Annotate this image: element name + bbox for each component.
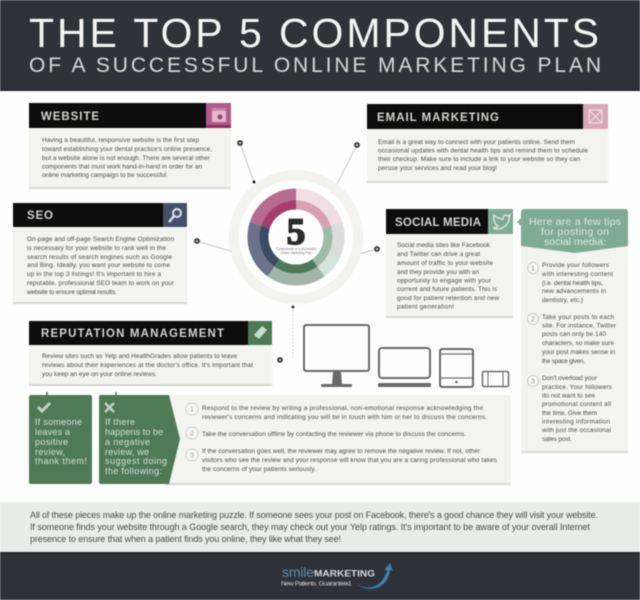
icon: phone [482,372,508,386]
icon: twitter bird [488,209,513,234]
tip 1: 1 [531,266,535,272]
donut caption: Online Marketing Plan [280,251,312,255]
summary band: If someone finds your website through a Google search, they may check out your Yelp ratings. It's important to be aware of your overall Internet [30,522,590,532]
header banner [0,0,640,91]
step 2: Take the conversation offline by contacting the reviewer via phone to discuss the concerns. [202,431,466,438]
step 1: reviewer's concerns and indicating you will be in touch with him or her to discuss the concerns. [202,414,487,421]
callout: negative review: suggest doing [105,456,167,466]
panel: seo [13,203,187,304]
callout: negative review [99,395,180,484]
tip 3: practice. Your followers [542,384,612,391]
heading: reputation management: REPUTATION MANAGEMENT [41,328,224,340]
tip 2: your post makes sense in [542,349,615,356]
text: social media: amount of traffic to your website [397,260,493,267]
heading: social media: SOCIAL MEDIA [395,217,481,229]
step 1: 1 [190,406,194,414]
donut caption [276,247,317,255]
tips header: Here are a few tips [529,216,621,228]
heading: seo: SEO [27,210,53,222]
callout: positive review: review, [35,447,65,457]
text: reputation management: reviews about their experiences at the doctor's office. It's important that [42,362,253,369]
panel: review steps [165,395,511,485]
step 2 [186,427,466,439]
connectors [47,141,379,395]
icon: laptop [378,348,431,387]
tip 3: promotional content all [542,401,611,408]
panel: social media [386,209,513,318]
footer [0,552,640,600]
icon: envelope [583,104,608,129]
text: email marketing: Email is a great way to connect with your patients online. Send them [378,139,575,146]
icon: tag [248,321,272,345]
callout: negative review: the following: [105,466,162,476]
tip 3: with just the occasional [541,427,611,434]
text: social media: Social media sites like Facebook [397,242,491,249]
text: seo: reputable, professional SEO team to work on your [27,280,175,287]
chart: five-segment donut [234,175,358,299]
text: website: online marketing campaign to be successful. [42,172,168,179]
panel: website [29,103,231,189]
logo: MARKETING [314,568,375,580]
callout: negative review: If there [105,417,135,427]
tip 2: site. For instance, Twitter [542,322,617,330]
tip 2: characters, so make sure [542,340,614,347]
tip 3: Don't overload your [542,375,598,382]
callout: negative review: review, we [105,447,149,457]
text: website: components that must work hand-in-hand in order for an [42,164,202,170]
logo: smile [282,564,314,580]
text: seo: up in the top 3 listings! It's important to hire a [27,271,161,278]
subtitle: OF A SUCCESSFUL ONLINE MARKETING PLAN [29,54,601,77]
icon: website [206,103,231,128]
text: seo: website to ensure optimal results. [26,289,117,296]
callout: positive review [29,395,92,484]
summary band [0,502,640,552]
callout: positive review: positive [35,437,68,447]
step 1 [186,403,487,421]
text: social media: good for patient retention and new [397,295,499,302]
tip 2: Take your posts to each [542,314,614,321]
step 3: If the conversation goes well, the reviewer may agree to remove the negative review. If not, other [202,448,481,455]
callout: positive review: leaves a [35,427,70,437]
heading: email marketing: EMAIL MARKETING [377,112,499,124]
tip 2: posts can only be 140 [542,331,606,338]
text: email marketing: peruse your services and read your blog! [378,165,497,172]
tip 2: the space given. [542,358,585,365]
tip 3: interesting information [542,418,610,426]
callout: positive review: thank them! [35,456,87,466]
step 1: Respond to the review by writing a professional, non-emotional response acknowledging the [202,405,483,412]
callout: negative review: happens to be [105,427,163,437]
step 3 [186,448,497,473]
tip 3: 3 [531,378,535,386]
text: seo: search results of search engines such as Google [27,254,172,261]
panel: social media tips [517,209,628,453]
text: seo: is necessary for your website to rank well in the [27,245,166,252]
tip 1: dentistry, etc.) [542,297,583,304]
tip 3 [528,375,612,443]
icon: logo arrow [356,563,393,589]
donut number: 5 [287,212,305,253]
text: social media: and Twitter can drive a great [397,251,480,258]
summary band: All of these pieces make up the online marketing puzzle. If someone sees your post on Facebook, there's a good chance they will visit your website. [30,510,598,520]
tip 1: Provide your followers [542,262,609,269]
tips header: social media: [544,236,606,248]
step 3: visitors who see the review and your response will know that you are a caring professional who takes [202,457,497,464]
text: website: Having a beautiful, responsive website is the first step [42,137,199,144]
text: website: but a website alone is not enough. There are several other [42,155,211,162]
summary band: presence to ensure that when a patient finds you online, they like what they see! [30,534,341,544]
text: reputation management: Review sites such as Yelp and HealthGrades allow patients to leave [42,353,237,360]
text: social media [397,242,499,310]
logo: New Patients. Guaranteed. [281,580,352,588]
logo [281,563,393,589]
text: website [42,137,212,179]
panel: email marketing [367,104,608,183]
title: THE TOP 5 COMPONENTS [29,10,599,56]
text: website: toward establishing your dental practice's online presence, [42,146,212,153]
tip 1: (i.e. dental health tips, [542,280,603,287]
tip 1 [528,262,613,304]
tip 1: with interesting content [541,271,613,278]
callout: positive review: If someone [35,417,82,427]
text: reputation management [42,353,253,378]
text: social media: current and future patients. This is [397,286,497,293]
text: social media: and they provide you with an [397,269,479,276]
step 3: 3 [190,452,194,460]
text: reputation management: you keep an eye on your online reviews. [42,371,157,378]
icon: desktop monitor [304,325,369,387]
tip 2: 2 [531,316,535,324]
icon: check mark [38,403,50,411]
tip 3: sales post. [542,436,572,443]
text: email marketing [378,139,588,172]
tips header: for posting on [541,226,609,238]
tip 3: do not want to see [542,392,595,400]
text: social media: patient generation! [397,304,454,310]
icon: cross mark [105,403,114,412]
text: seo: On-page and off-page Search Engine Optimization [27,236,174,243]
tips header [517,209,628,253]
text: seo: and Bing. Ideally, you want your website to come [27,262,170,269]
text: social media: opportunity to engage with your [397,278,492,284]
callout: negative review: a negative [105,437,150,447]
tip 3: the time. Give them [542,410,597,417]
text: seo [26,236,175,296]
panel: reputation management [29,321,272,386]
icon: tablet [440,349,473,387]
text: email marketing: their checkup. Make sure to include a link to your website so they can [378,156,580,163]
step 3: the concerns of your patients seriously. [202,466,316,473]
icon: magnifier [163,203,187,227]
tip 2 [528,314,617,365]
text: email marketing: occasional updates with dental health tips and remind them to schedule [378,148,588,154]
donut caption: Components of a Successful [276,247,317,251]
step 2: 2 [190,430,194,438]
tip 1: new advancements in [542,288,606,295]
heading: website: WEBSITE [41,111,99,123]
